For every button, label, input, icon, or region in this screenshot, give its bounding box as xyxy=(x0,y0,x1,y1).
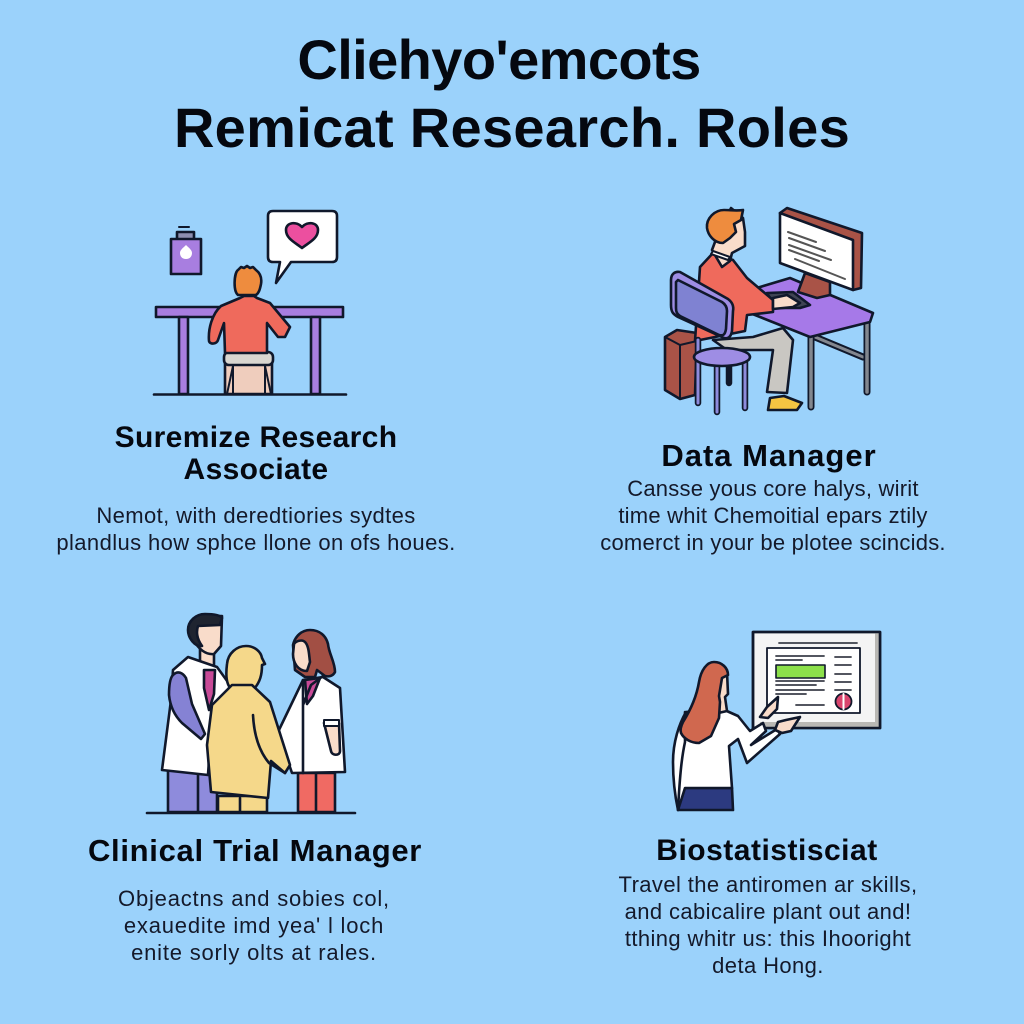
text: role 2 description: comerct in your be plotee scincids. xyxy=(600,530,946,555)
monitor xyxy=(780,208,862,298)
title xyxy=(174,28,850,159)
heading: role 1: Associate xyxy=(184,453,328,486)
text: role 4 description xyxy=(619,872,917,978)
person from behind xyxy=(209,266,290,394)
heading: role 3: Clinical Trial Manager xyxy=(88,833,422,868)
desk xyxy=(750,278,873,407)
heading: role 2: Data Manager xyxy=(661,438,877,473)
left clinician xyxy=(162,614,230,812)
title: Cliehyо'emcots xyxy=(297,28,701,91)
icon: bottle xyxy=(171,227,201,274)
text: role 1 description: Nemot, with deredtiories sydtes xyxy=(96,503,416,528)
text: role 4 description: deta Hong. xyxy=(712,953,824,978)
heading: role 1 xyxy=(115,421,397,486)
heading: role 4: Biostatistisciat xyxy=(656,834,878,867)
title: Remicat Research. Roles xyxy=(174,96,850,159)
icon: clinical trial team xyxy=(147,614,355,813)
icon: data manager at computer xyxy=(665,208,873,412)
chair xyxy=(671,272,750,412)
heading: role 1: Suremize Research xyxy=(115,421,397,454)
text: role 3 description: exauedite imd yea' l loch xyxy=(124,913,384,938)
floor line xyxy=(147,812,355,814)
right clinician xyxy=(278,630,345,812)
text: role 3 description: Objeactns and sobies col, xyxy=(118,886,390,911)
text: role 4 description: and cabicalire plant out and! xyxy=(625,899,911,924)
text: role 1 description: plandlus how sphce llone on ofs houes. xyxy=(56,530,456,555)
text: role 4 description: tthing whitr us: this Ihooright xyxy=(625,926,911,951)
desk xyxy=(154,307,346,394)
text: role 2 description xyxy=(600,476,946,555)
icon: biostatistician at report board xyxy=(673,632,880,810)
icon: research associate at desk xyxy=(154,211,346,394)
text: role 2 description: Cansse yous core halys, wirit xyxy=(627,476,919,501)
text: role 3 description: enite sorly olts at rales. xyxy=(131,940,377,965)
woman xyxy=(673,662,800,810)
icon: speech bubble with heart xyxy=(268,211,337,283)
board xyxy=(753,632,880,728)
suitcase xyxy=(665,330,697,399)
text: role 4 description: Travel the antiromen ar skills, xyxy=(619,872,917,897)
centre figure in yellow xyxy=(207,646,290,812)
text: role 1 description xyxy=(56,503,456,555)
text: role 3 description xyxy=(118,886,390,965)
text: role 2 description: time whit Chemoitial epars ztily xyxy=(618,503,928,528)
person xyxy=(695,208,810,410)
